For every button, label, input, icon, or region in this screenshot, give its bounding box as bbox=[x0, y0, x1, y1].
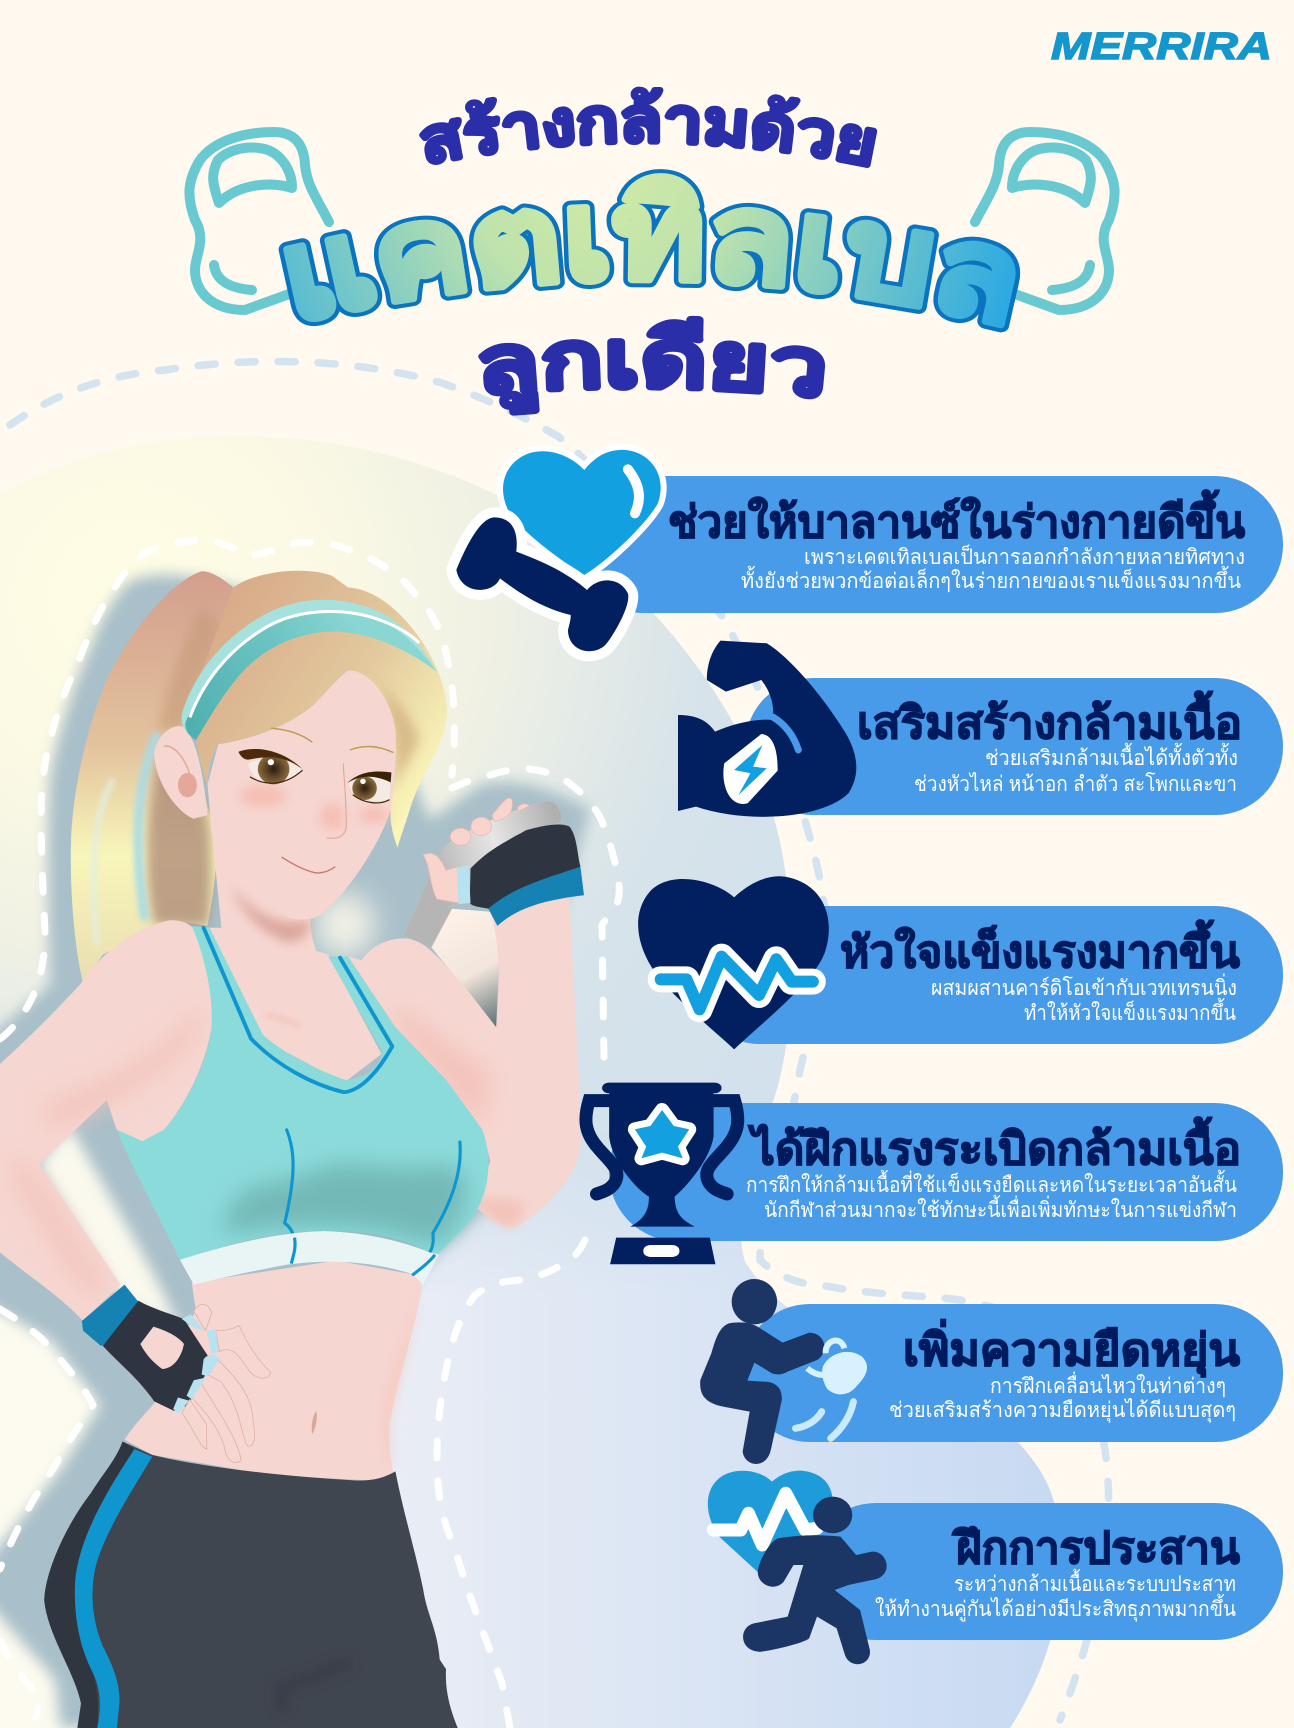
eyebrows bbox=[271, 728, 393, 753]
heading: หัวใจแข็งแรงมากขึ้น bbox=[840, 919, 1240, 977]
left eye bbox=[238, 749, 302, 784]
pants bbox=[44, 1441, 459, 1728]
heading: เสริมสร้างกล้ามเนื้อ bbox=[857, 690, 1242, 748]
icon: heart with pulse bbox=[638, 876, 829, 1049]
heart highlight bbox=[628, 469, 639, 513]
belly shading bbox=[383, 1294, 419, 1470]
hand on hip bbox=[82, 1285, 271, 1462]
base plate slot bbox=[643, 1245, 679, 1257]
heading: ช่วยให้บาลานซ์ในร่างกายดีขึ้น bbox=[668, 489, 1245, 547]
motion arc 1 bbox=[795, 1412, 822, 1428]
figure shadow bbox=[0, 575, 590, 1728]
pill 5 bbox=[742, 1304, 1283, 1442]
kettlebell bbox=[822, 1352, 867, 1394]
line 1: ระหว่างกล้ามเนื้อและระบบประสาท bbox=[954, 1569, 1236, 1596]
tank top shading bbox=[221, 1164, 466, 1245]
glove bbox=[103, 1301, 208, 1411]
line 1: การฝึกให้กล้ามเนื้อที่ใช้แข็งแรงยืดและหดในระยะเวลาอันสั้น bbox=[746, 1170, 1237, 1197]
light wedge between arm and body bbox=[38, 1125, 180, 1330]
cup bbox=[609, 1092, 714, 1227]
navel bbox=[312, 1411, 317, 1435]
ponytail bbox=[71, 571, 233, 983]
heading: ฝึกการประสาน bbox=[951, 1524, 1240, 1573]
right eye bbox=[347, 771, 391, 803]
hole skin bbox=[140, 1327, 184, 1369]
motion arc 2 bbox=[831, 1402, 853, 1438]
pill 2 bbox=[745, 678, 1283, 815]
body bbox=[700, 1322, 824, 1464]
star bbox=[635, 1110, 689, 1158]
icon: flexed arm bbox=[678, 641, 856, 817]
head bbox=[732, 1279, 777, 1324]
icon: kettlebell outline right bbox=[975, 132, 1115, 310]
forearm cuff bbox=[82, 1285, 138, 1346]
line 1: ช่วยเสริมกล้ามเนื้อได้ทั้งตัวทั้ง bbox=[985, 743, 1238, 770]
body bbox=[743, 1535, 887, 1664]
text: benefit 2 bbox=[857, 690, 1242, 796]
gap behind raised arm bbox=[431, 909, 500, 1027]
title main word: แคตเทิลเบล bbox=[278, 169, 1020, 332]
line 1: การฝึกเคลื่อนไหวในท่าต่างๆ bbox=[990, 1371, 1226, 1398]
line 1: เพราะเคตเทิลเบลเป็นการออกกำลังกายหลายทิศทาง bbox=[804, 543, 1245, 569]
left arm bbox=[0, 920, 212, 1321]
pill 6 bbox=[808, 1503, 1283, 1640]
icon: trophy bbox=[586, 1083, 738, 1264]
heart bbox=[503, 450, 661, 575]
base bbox=[610, 1238, 715, 1264]
rim bbox=[602, 1083, 722, 1093]
text: benefit 5 bbox=[889, 1319, 1240, 1423]
pants inner shade bbox=[44, 1441, 134, 1728]
wrist glove bbox=[457, 824, 584, 926]
nose bbox=[326, 763, 346, 838]
muscle crease bbox=[773, 717, 798, 750]
heading: ได้ฝึกแรงระเบิดกล้ามเนื้อ bbox=[748, 1116, 1241, 1174]
belly bbox=[125, 1261, 422, 1481]
icon: person lunging with kettlebell bbox=[700, 1279, 867, 1464]
line 2: ให้ทำงานคู่กันได้อย่างมีประสิทธุภาพมากขึ้น bbox=[875, 1594, 1236, 1622]
heading: เพิ่มความยืดหยุ่น bbox=[903, 1319, 1240, 1378]
logo: MERRIRA bbox=[1051, 26, 1272, 68]
lips bbox=[282, 857, 335, 873]
line 2: นักกีฬาส่วนมากจะใช้ทักษะนี้เพื่อเพิ่มทักษะในการแข่งกีฬา bbox=[764, 1195, 1237, 1222]
dashed white paths around figure bbox=[0, 540, 619, 1728]
bolt bbox=[734, 745, 767, 795]
ear bbox=[154, 726, 208, 819]
kettlebell handle bbox=[807, 1340, 844, 1375]
hair top bbox=[182, 571, 447, 847]
head bbox=[813, 1497, 852, 1533]
pulse outline bbox=[661, 957, 813, 1009]
dashed blue path bbox=[10, 361, 1109, 1720]
belly, pants and lower body bbox=[44, 1261, 459, 1728]
light glow right of neck bbox=[315, 893, 375, 957]
title main word: แคตเทิลเบล bbox=[283, 173, 1016, 328]
kettlebell handle bbox=[403, 801, 562, 948]
arm silhouette bbox=[678, 641, 856, 817]
pulse bbox=[713, 1493, 817, 1545]
icon: heart and dumbbell bbox=[456, 450, 661, 651]
fingers bbox=[182, 1304, 271, 1462]
line 2: ช่วยเสริมสร้างความยืดหยุ่นได้ดีแบบสุดๆ bbox=[889, 1398, 1236, 1423]
title line 3: ลูกเดียว bbox=[478, 316, 826, 416]
background blob bbox=[0, 436, 1062, 1728]
text: benefit 3 bbox=[840, 919, 1240, 1025]
line 2: ทำให้หัวใจแข็งแรงมากขึ้น bbox=[1024, 998, 1236, 1025]
fingers bbox=[423, 798, 529, 903]
dumbbell bbox=[456, 517, 628, 651]
pants crease bbox=[281, 1661, 350, 1711]
woman illustration bbox=[0, 571, 584, 1728]
line 1: ผสมผสานคาร์ดิโอเข้ากับเวทเทรนนิ่ง bbox=[931, 973, 1237, 1000]
line 2: ทั้งยังช่วยพวกข้อต่อเล็กๆในร่ายกายของเราแข็งแรงมากขึ้น bbox=[741, 566, 1241, 593]
headband bbox=[182, 600, 437, 740]
heart bbox=[638, 876, 829, 1049]
waistband bbox=[180, 1231, 439, 1285]
chest and neck bbox=[198, 828, 382, 1083]
handles bbox=[586, 1101, 738, 1194]
bolt badge bbox=[723, 734, 778, 804]
pulse line bbox=[661, 957, 813, 1009]
text: benefit 6 bbox=[875, 1524, 1240, 1622]
line 2: ช่วงหัวไหล่ หน้าอก ลำตัว สะโพกและขา bbox=[914, 772, 1237, 796]
face bbox=[208, 670, 396, 920]
tank trim bbox=[204, 928, 460, 1274]
hair shadow bbox=[380, 683, 419, 790]
blush bbox=[239, 784, 389, 831]
finger bands bbox=[173, 1314, 220, 1414]
pants stripe bbox=[75, 1449, 152, 1728]
pill 1 bbox=[575, 476, 1283, 613]
pill 3 bbox=[692, 906, 1283, 1044]
pill 4 bbox=[609, 1103, 1283, 1241]
text: benefit 4 bbox=[746, 1116, 1241, 1222]
waistband trim bbox=[291, 1238, 435, 1275]
tank top bbox=[117, 926, 488, 1260]
icon: runner with heart bbox=[708, 1471, 887, 1664]
right arm bbox=[348, 897, 581, 1228]
icon: kettlebell outline left bbox=[189, 132, 329, 310]
text: benefit 1 bbox=[668, 489, 1245, 593]
title line 1: สร้างกล้ามด้วย bbox=[419, 86, 878, 168]
heart bbox=[708, 1471, 833, 1583]
